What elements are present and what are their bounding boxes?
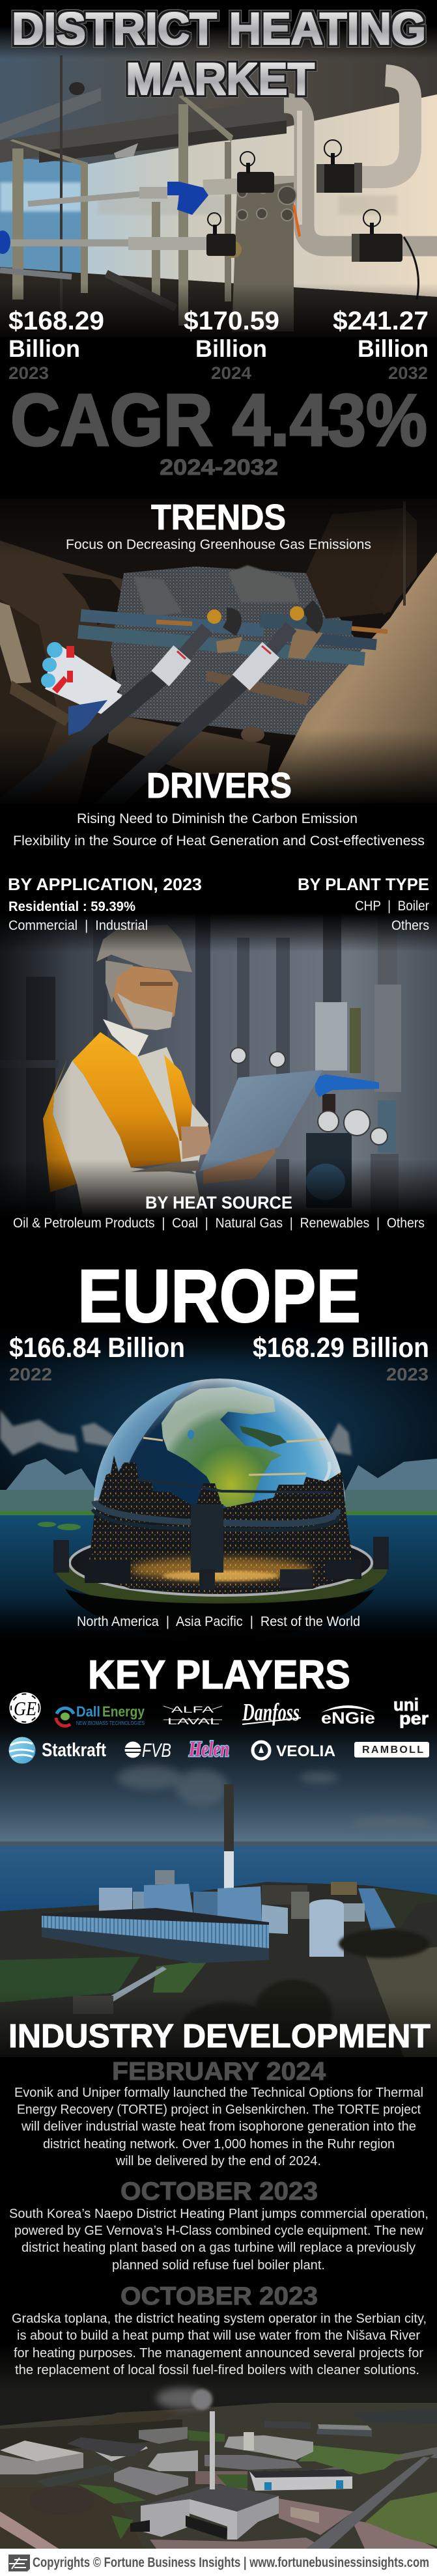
development: February 2024: district heating network. Over 1,000 homes in the Ruhr region [43,2137,395,2151]
development: October 2023 second: Gradska toplana, the district heating system operator in the Serbian city, [12,2312,427,2326]
development: October 2023 first: powered by GE Vernova’s H-Class combined cycle equipment. The new [14,2224,424,2238]
CAGR callout: 2024-2032 [160,455,278,480]
market value 2032: 2032 [388,363,428,383]
development: October 2023 first: South Korea’s Naepo District Heating Plant jumps commercial operation, [9,2207,429,2221]
vest [72,1032,181,1168]
helmet [96,925,192,972]
development: October 2023 first [9,2177,429,2273]
city inside dome [53,1455,389,1594]
development: February 2024: Energy Recovery (TORTE) project in Gelsenkirchen. The TORTE project [17,2103,421,2117]
wooden planks [0,602,323,775]
mountains [0,1459,437,1498]
development: February 2024: will be delivered by the end of 2024. [115,2154,321,2168]
market value 2023: Billion [8,335,80,362]
logo: FVB [124,1740,171,1761]
floating island base [56,1545,388,1631]
chimney and smoke [210,2411,215,2489]
Europe value 2022: 2022 [9,1364,52,1384]
pink yard surfaces and road [150,2538,326,2549]
back pipes [78,615,388,659]
buildings [0,2409,437,2540]
logo: Alfa Laval: LAVAL [167,1716,219,1726]
plate heat exchanger [232,182,294,331]
photo: city under glass dome globe [0,1326,437,1641]
logo: GE: GE [14,1697,36,1720]
development: October 2023 first: district heating plant based on a gas turbine will replace a previously [21,2241,416,2255]
right soil bank [268,552,437,804]
blue valve [167,182,208,215]
industry development heading: INDUSTRY DEVELOPMENT [8,2017,430,2054]
panel: industry development background band [0,2057,437,2344]
engineer [43,925,275,1218]
logo: Veolia: VEOLIA [276,1743,335,1760]
market value 2032: $241.27 [333,307,429,335]
face [113,966,178,1029]
Europe value 2022 [9,1332,185,1384]
market value 2024: 2024 [211,363,251,383]
logo: FVB: FVB [142,1740,171,1761]
by application segment [8,875,202,933]
by plant type segment [298,875,429,933]
drivers text: Flexibility in the Source of Heat Generation and Cost-effectiveness [13,833,425,848]
development: October 2023 second: is about to build a heat pump that will use water from the Nišava River [17,2329,420,2343]
development: February 2024: will deliver industrial waste heat from isophorone generation into the [21,2120,416,2134]
shoreline green band [0,1490,94,1511]
market value 2023: $168.29 [8,307,104,335]
by application segment: BY APPLICATION, 2023 [8,875,202,894]
logo: Statkraft [9,1737,106,1763]
market value 2024: Billion [195,335,267,362]
photo: insulated pipes in trench [0,499,437,814]
by plant type segment: BY PLANT TYPE [298,875,429,894]
drivers text: Rising Need to Diminish the Carbon Emission [77,811,358,826]
hands [181,1127,212,1159]
market value 2023 [8,307,104,383]
title: DISTRICT HEATING [12,3,426,54]
development: October 2023 second [12,2282,427,2377]
development: October 2023 second: OCTOBER 2023 [120,2282,318,2310]
globe inside glass dome [94,1379,345,1516]
logo: Statkraft: Statkraft [42,1740,106,1761]
Europe value 2022: $166.84 Billion [9,1332,185,1364]
by heat source segment [13,1193,425,1231]
footer bar [0,2549,437,2576]
trends heading: TRENDS [151,497,286,537]
by heat source segment: BY HEAT SOURCE [145,1193,292,1212]
title [12,3,426,104]
logo: Alfa Laval: ALFA [171,1704,214,1715]
Europe value 2023: 2023 [386,1364,429,1384]
main boiler house [141,2499,190,2537]
market value 2032 [333,307,429,383]
drivers text [13,811,425,848]
grass areas [298,2445,404,2474]
market value 2032: Billion [358,335,429,362]
logo: Danfoss [242,1699,301,1726]
market value 2024: $170.59 [184,307,279,335]
clouds [0,1410,352,1455]
logo: Veolia [253,1742,335,1760]
other regions: North America | Asia Pacific | Rest of the World [77,1614,360,1629]
market value 2023: 2023 [8,363,49,383]
development: October 2023 second: the replacement of local fossil fuel-fired boilers with cleaner solutions. [15,2363,419,2377]
drivers heading: DRIVERS [147,765,292,805]
black valves and hand wheels [206,140,402,262]
logo: Dall Energy [56,1703,145,1726]
main insulated pipes [0,606,315,814]
development: October 2023 first: planned solid refuse fuel boiler plant. [112,2258,325,2273]
shirt sleeve and body [53,1061,203,1218]
key players heading: KEY PLAYERS [88,1653,350,1698]
logo: Ramboll: RAMBOLL [362,1744,423,1756]
by plant type segment: CHP | Boiler [355,899,429,914]
logo: Dall Energy: Energy [102,1703,145,1720]
development: February 2024 [14,2058,423,2168]
woodland and lower left ground [0,2487,145,2549]
by plant type segment: Others [391,918,429,933]
white spare pipes with red bands [41,642,119,736]
development: February 2024: FEBRUARY 2024 [112,2058,326,2086]
photo: engineer with laptop [0,913,437,1218]
logo: Ramboll [354,1742,429,1757]
by application segment: Residential : 59.39% [8,899,135,914]
footer logo [8,2555,30,2571]
laptop [199,1070,323,1171]
development: October 2023 second: for heating purposes. The management announced several projects for [14,2346,423,2360]
region heading: EUROPE [78,1255,361,1338]
logo: Dall Energy: NEW BIOMASS TECHNOLOGIES [76,1720,145,1726]
logo: Danfoss: Danfoss [242,1699,300,1726]
logo: Helen: Helen [188,1737,229,1761]
photo: pipework and valves in plant room [0,26,437,337]
development: October 2023 first: OCTOBER 2023 [120,2177,318,2205]
logo: Alfa Laval [163,1704,222,1726]
title: MARKET [126,53,315,104]
logo: ENGIE: eNGie [321,1709,375,1728]
development: February 2024: Evonik and Uniper formally launched the Technical Options for Thermal [14,2086,423,2100]
frame posts [10,55,233,331]
trends text: Focus on Decreasing Greenhouse Gas Emissions [66,537,371,552]
pipes [0,76,437,308]
logo: GE [9,1692,41,1724]
logo: Dall Energy: Dall [76,1703,100,1720]
Europe value 2023 [253,1332,429,1384]
market value 2024 [184,307,279,383]
photo: industrial park with chimney [0,2344,437,2549]
land [0,1882,437,2057]
logo: Uniper: per [399,1709,429,1728]
logo: Uniper: uni [393,1695,419,1715]
photo: power plant by the sea [0,1706,437,2057]
plant buildings [42,1784,365,2014]
key players logos [9,1692,429,1763]
gauges [231,1048,388,1145]
by application segment: Commercial | Industrial [8,918,148,933]
logo: Uniper [393,1695,429,1728]
